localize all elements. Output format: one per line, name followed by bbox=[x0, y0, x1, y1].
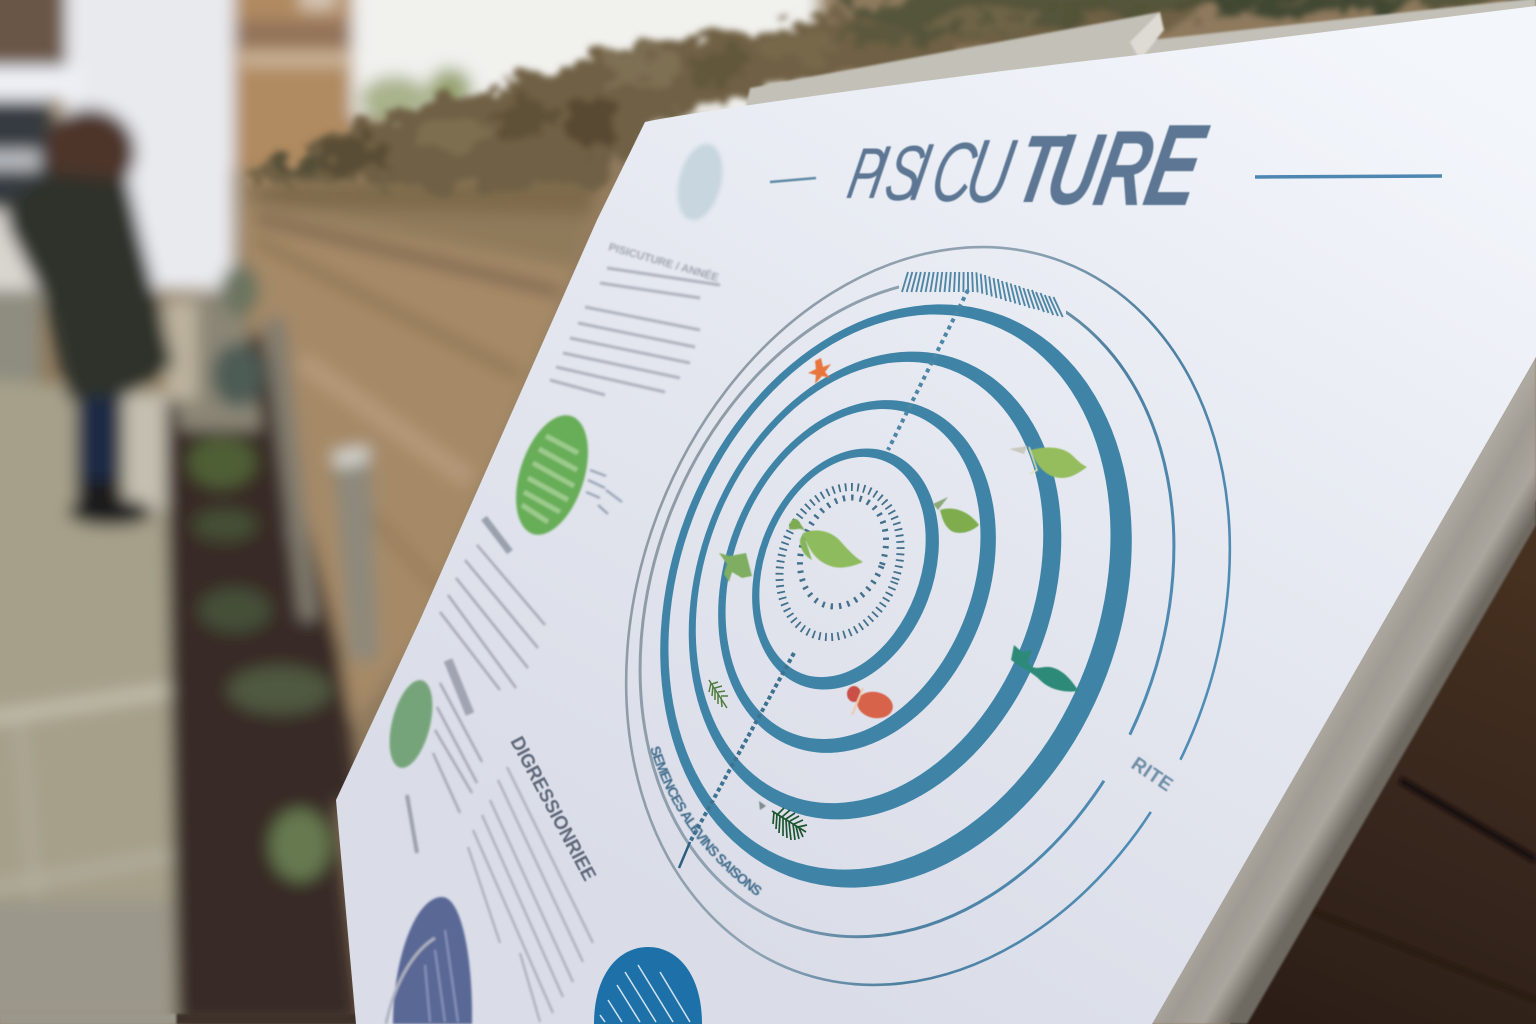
title rule right bbox=[1255, 176, 1442, 177]
icon: dark feather bbox=[772, 808, 807, 840]
thick ring D bbox=[719, 421, 972, 717]
sign side edge bbox=[1150, 355, 1536, 1024]
icon: left turtle bbox=[719, 553, 752, 582]
icon: middle leaf bbox=[933, 497, 979, 533]
icon: upper right leaf bbox=[1009, 446, 1087, 478]
icon: tiny grey mark bbox=[759, 801, 766, 810]
title: U bbox=[958, 122, 1023, 222]
icon: small feather bbox=[709, 680, 728, 708]
sky bbox=[340, 0, 820, 120]
title: U bbox=[1038, 113, 1112, 226]
logo bbox=[670, 139, 730, 225]
icon: teal fish bbox=[1011, 645, 1079, 692]
navy circle bbox=[386, 897, 472, 1024]
concentric diagram bbox=[624, 246, 1232, 986]
title: C bbox=[924, 127, 984, 220]
text block: lower paragraph bbox=[468, 767, 593, 1022]
blue circle bbox=[594, 947, 702, 1024]
title: I bbox=[864, 131, 895, 214]
label rite: RITE bbox=[1127, 754, 1176, 796]
text block: intro bbox=[550, 240, 720, 395]
green circle one bbox=[502, 406, 602, 544]
second heading bbox=[484, 518, 510, 552]
icon: central leaf bbox=[789, 519, 863, 568]
icon: red creature bbox=[847, 686, 895, 721]
title: E bbox=[1136, 102, 1217, 231]
lower dashed radial bbox=[690, 653, 794, 842]
upper dashed radial bbox=[888, 290, 968, 450]
sign board bbox=[336, 6, 1536, 1024]
planting bed bbox=[165, 330, 360, 1024]
central dotted ring inner bbox=[785, 485, 901, 619]
central dotted ring outer bbox=[759, 470, 921, 654]
strip keeping the lower photo edge solid bbox=[0, 1014, 360, 1024]
person bbox=[126, 395, 166, 510]
wall plank gaps bbox=[255, 218, 560, 292]
title bbox=[838, 102, 1217, 231]
title: R bbox=[1086, 109, 1163, 228]
heading: lower text block: DIGRESSIONRIEE bbox=[506, 733, 599, 885]
title: I bbox=[904, 127, 938, 217]
title: S bbox=[878, 130, 931, 217]
brick building bbox=[234, 0, 352, 170]
wood wall bbox=[240, 172, 615, 720]
second thin ring bbox=[638, 286, 1176, 938]
title: T bbox=[1007, 115, 1074, 223]
thick ring A bbox=[579, 236, 1213, 956]
title: P bbox=[842, 134, 890, 214]
small legend beside green circle bbox=[586, 470, 622, 514]
thick ring B bbox=[624, 297, 1126, 874]
dark timber below sign bbox=[1230, 500, 1536, 1024]
hedge bbox=[248, 0, 1200, 190]
third heading bbox=[448, 660, 470, 714]
icon: orange star bbox=[808, 358, 831, 384]
intro heading: PISICUTURE / ANNÉE bbox=[607, 240, 720, 284]
hatched arc bbox=[902, 272, 1063, 317]
white building bbox=[62, 0, 234, 290]
curved label lower left: SEMENCES ALEVINS SAISONS bbox=[650, 746, 762, 896]
hedge mottling bbox=[324, 137, 396, 173]
text block: third column bbox=[407, 660, 482, 853]
sign top bracket bbox=[745, 0, 1536, 110]
upper window bbox=[0, 0, 66, 68]
green circle two bbox=[382, 676, 440, 772]
plants bbox=[188, 436, 256, 488]
pavement bbox=[0, 380, 176, 1024]
text block: second column bbox=[440, 518, 545, 690]
title rule left bbox=[770, 178, 816, 182]
green plants far bbox=[360, 76, 430, 124]
outer thin ring bbox=[624, 246, 1232, 986]
thick ring C bbox=[669, 360, 1045, 793]
posts bbox=[263, 318, 318, 620]
